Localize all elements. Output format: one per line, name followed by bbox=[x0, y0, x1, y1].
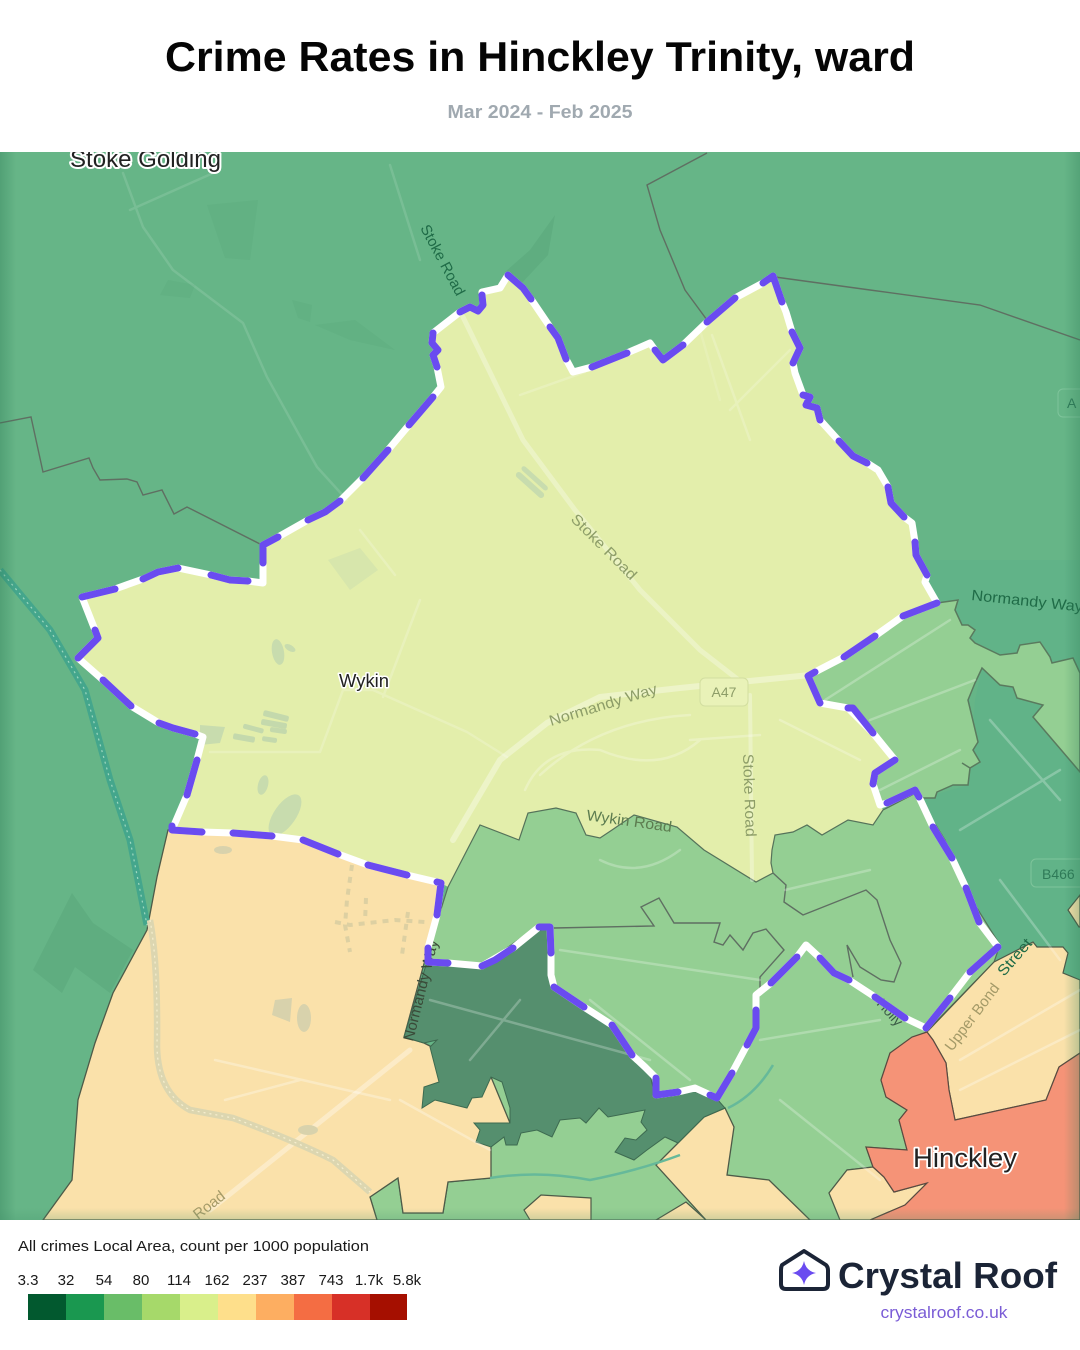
road badge: A bbox=[1058, 389, 1080, 417]
legend tick labels: 162 bbox=[204, 1272, 230, 1289]
region: eastern peach bbox=[927, 942, 1080, 1120]
region: western peach bbox=[43, 830, 510, 1220]
road badge: A: A bbox=[1067, 395, 1077, 411]
region: small peach south two bbox=[656, 1202, 706, 1220]
subtitle: date range: Mar 2024 - Feb 2025 bbox=[448, 101, 632, 122]
road badge: B466 bbox=[1031, 859, 1080, 887]
ponds and buildings in the ward bbox=[200, 465, 549, 841]
canal through peach area bbox=[150, 920, 370, 1192]
region: darkest low-crime estate bbox=[404, 928, 725, 1160]
map edge vignette bbox=[0, 152, 1080, 1220]
dashed estate paths on peach bbox=[335, 865, 425, 955]
website url: crystalroof.co.uk bbox=[880, 1304, 1008, 1322]
road badge: A47: A47 bbox=[712, 684, 737, 700]
neighbouring boundary lines bbox=[0, 153, 1080, 990]
legend tick labels: 743 bbox=[318, 1272, 344, 1289]
map label: Normandy Way east: Normandy Way bbox=[971, 587, 1080, 616]
region: south-central peach bbox=[656, 1108, 810, 1220]
region: peach near Hinckley bbox=[829, 1167, 927, 1220]
logo: Crystal Roof bbox=[781, 1251, 1058, 1296]
map label: Upper Bond Street: Upper Bond bbox=[942, 980, 1003, 1054]
legend tick labels: 237 bbox=[242, 1272, 268, 1289]
region: high-crime Hinckley centre bbox=[866, 1032, 1080, 1220]
legend tick labels: 80 bbox=[133, 1272, 149, 1289]
legend tick labels: 387 bbox=[280, 1272, 306, 1289]
ward boundary: white underlay bbox=[78, 275, 998, 1098]
map label: Normandy Way central: Normandy Way bbox=[547, 681, 660, 730]
map label: Road south west: Road bbox=[190, 1188, 229, 1223]
map label: Wykin: Wykin bbox=[339, 671, 389, 691]
legend tick labels: 54 bbox=[96, 1272, 112, 1289]
region: eastern low-crime area bbox=[916, 560, 1080, 980]
region: small peach south bbox=[524, 1195, 591, 1220]
waterway: canal west bbox=[0, 570, 147, 925]
legend tick labels bbox=[18, 1272, 422, 1289]
map label: Stoke Road central: Stoke Road bbox=[567, 511, 640, 584]
map label: Stoke Road south: Stoke Road bbox=[739, 754, 759, 837]
icon: house with star bbox=[781, 1251, 828, 1289]
region: southern light green bbox=[370, 793, 1000, 1220]
darker field patches north and west bbox=[33, 200, 555, 993]
region: central ward yellow bbox=[78, 275, 937, 887]
map label: Wykin Road: Wykin Road bbox=[585, 807, 673, 836]
road badge: A47 bbox=[700, 678, 748, 706]
grey patches on peach bbox=[214, 846, 318, 1135]
map label: Normandy Way south: Normandy Way bbox=[400, 937, 442, 1043]
map label: Holly: Holly bbox=[874, 995, 906, 1029]
map label: Upper Bond Street: Street bbox=[994, 935, 1036, 980]
legend bbox=[18, 1239, 422, 1320]
ward boundary: purple dashes bbox=[78, 275, 998, 1098]
legend tick labels: 5.8k bbox=[393, 1272, 422, 1289]
region: north-east light green bbox=[808, 600, 1080, 805]
region: far east peach corner bbox=[1068, 895, 1080, 927]
title: Crime Rates in Hinckley Trinity, ward bbox=[165, 33, 915, 80]
legend tick labels: 32 bbox=[58, 1272, 74, 1289]
legend colour scale bbox=[28, 1294, 407, 1320]
map label: Upper Bond Street bbox=[944, 938, 1033, 1050]
legend tick labels: 114 bbox=[167, 1272, 191, 1289]
legend tick labels: 3.3 bbox=[18, 1272, 38, 1289]
road network bbox=[123, 165, 1080, 1210]
legend title: All crimes Local Area, count per 1000 population bbox=[18, 1239, 369, 1255]
map label: Hinckley: Hinckley bbox=[913, 1143, 1018, 1173]
road badge: B466: B466 bbox=[1042, 866, 1075, 882]
map label: Stoke Road north: Stoke Road bbox=[416, 222, 468, 299]
legend tick labels: 1.7k bbox=[355, 1272, 384, 1289]
map label: Stoke Golding: Stoke Golding bbox=[70, 146, 221, 173]
wordmark: Crystal Roof bbox=[838, 1255, 1058, 1296]
stream bbox=[490, 1065, 773, 1180]
choropleth map bbox=[0, 146, 1080, 1223]
